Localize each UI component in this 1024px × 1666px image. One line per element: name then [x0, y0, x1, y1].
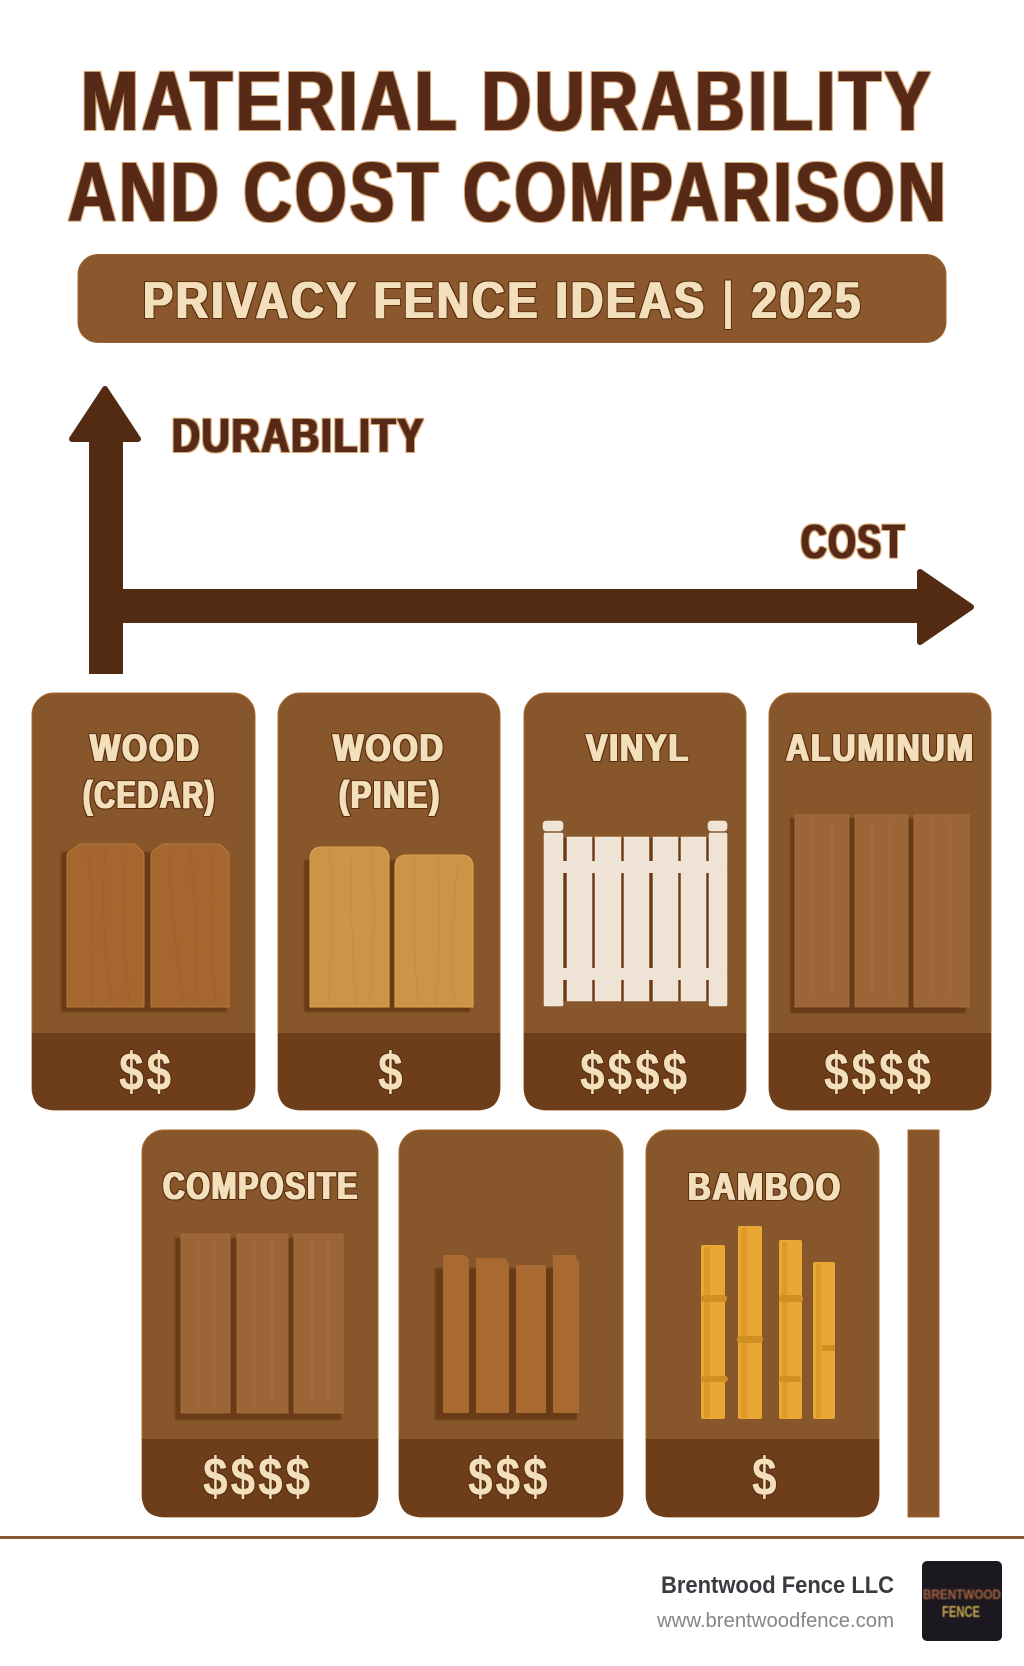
logo: BRENTWOOD — [923, 1586, 1001, 1602]
icon: uneven planks — [435, 1255, 579, 1420]
panel: cropped card edge — [908, 1130, 939, 1517]
subtitle banner — [78, 254, 946, 342]
panel: composite — [142, 1130, 378, 1517]
icon: composite planks — [175, 1234, 343, 1420]
panel: wood cedar: WOOD — [90, 727, 201, 770]
icon: pine planks — [304, 847, 473, 1012]
panel: vinyl — [524, 693, 746, 1110]
panel: wood cedar — [32, 693, 255, 1110]
price: one dollar: $ — [378, 1042, 405, 1102]
icon: vinyl fence — [543, 821, 727, 1006]
panel: bamboo — [646, 1130, 879, 1517]
icon: aluminum planks — [790, 815, 969, 1013]
logo: FENCE — [942, 1604, 980, 1621]
panel: unlabeled material — [399, 1130, 623, 1517]
subtitle banner: PRIVACY FENCE IDEAS | 2025 — [143, 272, 863, 330]
panel: aluminum: ALUMINUM — [786, 727, 975, 770]
arrow: durability axis — [72, 389, 138, 674]
axis label: durability: DURABILITY — [172, 410, 425, 463]
icon: cedar planks — [61, 844, 229, 1012]
footer divider — [0, 1536, 1024, 1539]
price: three dollars: $$$ — [468, 1447, 550, 1507]
arrow: cost axis — [123, 572, 971, 642]
logo — [922, 1561, 1002, 1641]
panel: wood pine: (PINE) — [339, 774, 441, 817]
price: four dollars: $$$$ — [203, 1447, 313, 1507]
price: one dollar: $ — [752, 1447, 779, 1507]
title — [68, 54, 949, 239]
panel: bamboo: BAMBOO — [688, 1166, 842, 1209]
price: four dollars: $$$$ — [824, 1042, 934, 1102]
icon: bamboo stalks — [701, 1226, 835, 1419]
axis label: cost: COST — [801, 516, 906, 569]
price: four dollars: $$$$ — [580, 1042, 690, 1102]
panel: wood pine: WOOD — [333, 727, 445, 770]
panel: vinyl: VINYL — [586, 727, 690, 770]
panel: wood pine — [278, 693, 500, 1110]
panel: wood cedar: (CEDAR) — [83, 774, 216, 817]
footer website: www.brentwoodfence.com — [656, 1609, 894, 1632]
panel: composite: COMPOSITE — [163, 1165, 359, 1208]
panel: aluminum — [769, 693, 991, 1110]
price: two dollars: $$ — [119, 1042, 174, 1102]
footer company name: Brentwood Fence LLC — [661, 1572, 894, 1599]
